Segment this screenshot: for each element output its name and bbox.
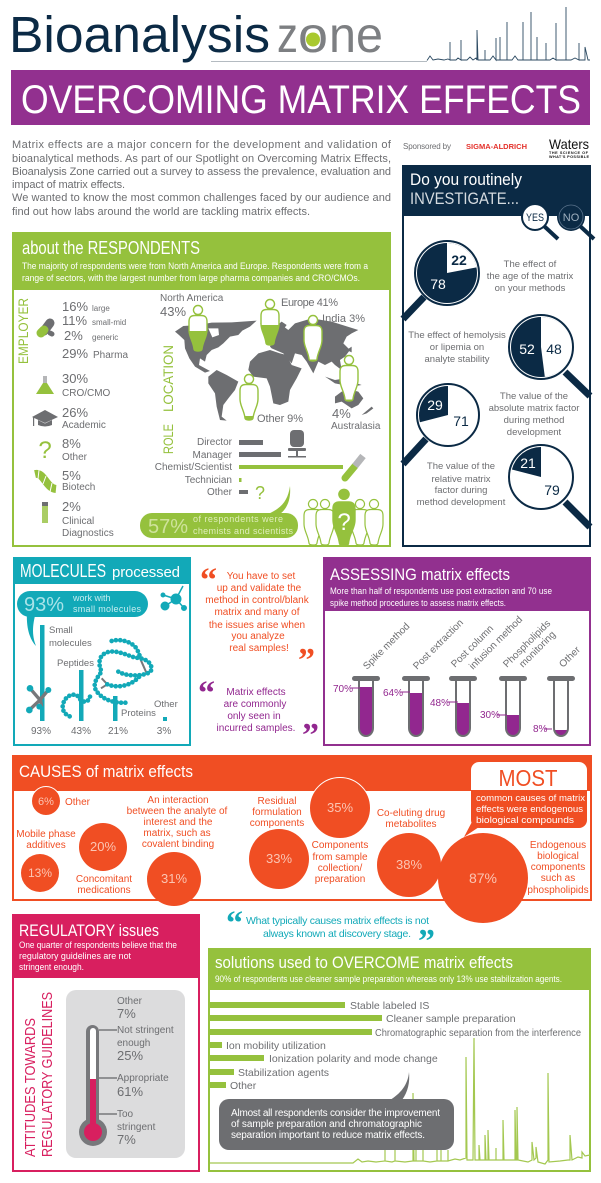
employer: pharma xyxy=(62,299,128,361)
quote: incurred samples: are commonly xyxy=(224,699,286,710)
employer: clinical diagnostics: Diagnostics xyxy=(62,528,114,539)
bar chart: solutions: Cleaner sample preparation xyxy=(386,1013,516,1025)
tube: post column infusion 48% xyxy=(430,614,525,736)
panel heading: INVESTIGATE... xyxy=(410,189,519,208)
tube: phospholipids monitoring 30% xyxy=(480,618,558,736)
pie: absolute matrix factor 29/71: 29 xyxy=(427,397,443,413)
employer: pharma: 11% xyxy=(62,313,87,328)
cause: residual formulation 33%: 33% xyxy=(266,851,292,866)
sponsors: Sponsored by xyxy=(403,142,451,151)
thermometer card xyxy=(66,990,185,1158)
bar chart: molecule types: Small xyxy=(49,625,73,636)
pie: age of matrix 22/78: 78 xyxy=(430,276,446,292)
logo: Bioanalysis Zone: Bioanalysis xyxy=(9,6,270,63)
pie: hemolysis 48/52: 52 xyxy=(519,341,535,357)
tube: other 8%: 8% xyxy=(533,724,548,735)
cause: concomitant medications 20% xyxy=(76,823,132,896)
cause: analyte-matrix interaction 31%: An interaction xyxy=(147,795,209,806)
employer: pharma: 16% xyxy=(62,299,88,314)
quote: control/blank matrix: method in control/blank xyxy=(205,595,310,606)
employer: other xyxy=(62,436,88,463)
employer: clinical diagnostics: Clinical xyxy=(62,516,94,527)
quote: incurred samples: only seen in xyxy=(227,711,281,722)
callout: 93% small molecules xyxy=(17,591,148,646)
illustration: peptide chain xyxy=(63,695,90,717)
logo: Bioanalysis Zone: z xyxy=(277,7,298,63)
cause: concomitant medications 20%: medications xyxy=(77,885,131,896)
quote: control/blank matrix: matrix and many of xyxy=(214,607,300,618)
cause: co-eluting metabolites 38%: Co-eluting drug xyxy=(377,808,445,819)
person: Australasia 4% xyxy=(340,356,358,401)
thermometer labels: stringent xyxy=(117,1122,156,1133)
thermometer labels: Too xyxy=(117,1109,134,1120)
intro text: Bioanalysis Zone carried out a survey to assess the prevalence, evaluation and xyxy=(12,166,391,178)
icon: vial xyxy=(42,502,48,523)
employer: academic: Academic xyxy=(62,420,106,431)
cause: endogenous compounds 87%: Endogenous xyxy=(530,840,586,851)
pie: age of matrix 22/78: 22 xyxy=(451,252,467,268)
tube: phospholipids monitoring 30%: 30% xyxy=(480,710,500,721)
thermometer labels: 61% xyxy=(117,1084,143,1099)
cause: co-eluting metabolites 38%: 38% xyxy=(396,857,422,872)
icon: group of people: ? xyxy=(337,509,351,536)
cause: co-eluting metabolites 38% xyxy=(377,808,445,897)
question text: relative matrix factor xyxy=(417,461,506,508)
cause: mobile phase additives 13% xyxy=(16,829,76,892)
respondents heading: about the RESPONDENTS xyxy=(22,238,200,258)
logo: Bioanalysis Zone: ne xyxy=(329,7,383,63)
bar chart: molecule types: molecules xyxy=(49,638,92,649)
quote: incurred samples: Matrix effects xyxy=(226,687,286,698)
callout: 93% small molecules: work with xyxy=(72,593,111,603)
bar chart: solutions: Ionization polarity and mode change xyxy=(269,1053,438,1065)
legend: yes magnifier: YES xyxy=(526,212,544,224)
cause: endogenous compounds 87%: components xyxy=(531,862,585,873)
question text: hemolysis xyxy=(408,330,506,365)
icon: office chair xyxy=(288,430,306,458)
question text: absolute matrix factor: The value of the xyxy=(500,391,568,402)
regulatory subtitle xyxy=(19,940,177,972)
location labels: 43% xyxy=(160,304,186,319)
tube: post column infusion 48%: infusion method xyxy=(467,614,525,672)
employer: pharma: 29% xyxy=(62,346,88,361)
sponsors: Waters xyxy=(549,136,589,152)
cause: residual formulation 33%: formulation xyxy=(252,807,302,818)
bar chart: molecule types xyxy=(31,625,178,737)
molecules heading: processed xyxy=(112,564,180,581)
location labels: North America xyxy=(160,293,224,304)
vertical label: attitudes towards regulatory guidelines: REGULATORY GUIDELINES xyxy=(39,992,56,1157)
bar chart: molecule types: 3% xyxy=(157,726,171,737)
cause: sample collection 35%: 35% xyxy=(327,800,353,815)
callout: sample preparation importance: of sample preparation and chromatographic xyxy=(231,1119,422,1130)
thermometer labels: Other xyxy=(117,996,143,1007)
thermometer labels: Not stringent xyxy=(117,1025,174,1036)
tube: post extraction 64% xyxy=(383,618,466,736)
regulatory subtitle: stringent enough. xyxy=(19,962,84,972)
panel: molecules processed xyxy=(13,557,191,745)
thermometer labels: 25% xyxy=(117,1048,143,1063)
pie: relative matrix factor 21/79: 79 xyxy=(544,482,560,498)
tube: other 8%: Other xyxy=(557,644,583,670)
callout: sample preparation importance: separation important to reduce matrix effects. xyxy=(231,1130,425,1141)
question text: relative matrix factor: relative matrix xyxy=(431,474,491,485)
callout: MOST common causes: biological compounds xyxy=(476,815,574,826)
tube: post column infusion 48%: Post column xyxy=(449,623,496,670)
callout: 57% chemists and scientists: 57% xyxy=(148,516,188,538)
cause: analyte-matrix interaction 31%: 31% xyxy=(161,871,187,886)
solutions heading: solutions used to OVERCOME matrix effects xyxy=(215,953,513,972)
person: India 3% xyxy=(304,316,322,361)
role bar chart: Director xyxy=(197,437,233,448)
cause: residual formulation 33%: Residual xyxy=(258,796,296,807)
cause: residual formulation 33% xyxy=(249,796,309,889)
cause: mobile phase additives 13%: 13% xyxy=(28,866,52,880)
causes heading: CAUSES of matrix effects xyxy=(19,762,193,781)
cause: analyte-matrix interaction 31% xyxy=(127,795,228,906)
tube: spike method 70%: 70% xyxy=(333,684,353,695)
quote: control/blank matrix: the issues arise when xyxy=(209,620,305,631)
location vertical label: LOCATION xyxy=(160,345,176,412)
bar chart: molecule types: Peptides xyxy=(57,658,94,669)
respondents subtitle: The majority of respondents were from North America and Europe. Respondents were from a xyxy=(22,261,369,271)
logo: Bioanalysis Zone xyxy=(9,6,383,63)
molecules heading: MOLECULES xyxy=(20,561,106,581)
world map xyxy=(175,318,373,421)
cause: sample collection 35% xyxy=(310,778,370,885)
cause: analyte-matrix interaction 31%: covalent binding xyxy=(142,839,214,850)
quote: incurred samples xyxy=(198,675,319,754)
tube: other 8% xyxy=(533,644,583,736)
icon: thermometer xyxy=(79,1025,117,1146)
molecules heading xyxy=(20,561,180,581)
employer: pharma: small-mid xyxy=(92,318,126,327)
quote: control/blank matrix: up and validate the xyxy=(217,583,302,594)
respondents subtitle xyxy=(22,261,369,283)
cause: endogenous compounds 87%: such as xyxy=(541,873,575,884)
question text: relative matrix factor: The value of the xyxy=(427,461,495,472)
cause: sample collection 35%: Components xyxy=(312,840,368,851)
cause: other 6%: 6% xyxy=(38,796,54,808)
panel: regulatory issues xyxy=(12,914,200,1171)
callout: sample preparation importance: Almost all respondents consider the improvement xyxy=(231,1108,440,1119)
question text: absolute matrix factor: absolute matrix factor xyxy=(489,403,579,414)
callout: MOST common causes: effects were endogenous xyxy=(476,804,583,815)
pie: absolute matrix factor 29/71: 71 xyxy=(453,413,469,429)
panel: solutions to overcome matrix effects xyxy=(208,948,591,1171)
thermometer labels: enough xyxy=(117,1038,150,1049)
cause: endogenous compounds 87%: 87% xyxy=(469,870,497,886)
bar chart: solutions: Stable labeled IS xyxy=(350,1000,429,1012)
cause: mobile phase additives 13%: additives xyxy=(26,840,66,851)
employer: other: 8% xyxy=(62,436,81,451)
thermometer labels: 7% xyxy=(117,1006,136,1021)
bar chart: solutions xyxy=(209,1000,581,1092)
thermometer labels: Appropriate xyxy=(117,1073,169,1084)
assessing heading: ASSESSING matrix effects xyxy=(330,565,510,584)
panel heading xyxy=(410,170,522,208)
pie: relative matrix factor 21/79 xyxy=(509,445,590,527)
icon: question mark: ? xyxy=(38,437,52,464)
icon: group of people xyxy=(304,489,383,546)
intro text: bioanalytical methods. As part of our Spotlight on Overcoming Matrix Effects, xyxy=(12,153,391,165)
icon: capsules xyxy=(41,323,52,334)
location labels: Europe 41% xyxy=(281,297,338,309)
intro text: We wanted to know the most common challenges faced by our audience and xyxy=(12,192,391,204)
quote: discovery stage: “ xyxy=(226,905,243,942)
employer: pharma: Pharma xyxy=(93,350,128,361)
employer: clinical diagnostics xyxy=(62,499,114,539)
role vertical label: ROLE xyxy=(160,424,176,454)
icon: mortarboard xyxy=(32,410,58,426)
bar chart: molecule types: Other xyxy=(154,699,178,710)
cause: endogenous compounds 87%: phospholipids xyxy=(527,885,589,896)
pie: absolute matrix factor 29/71 xyxy=(403,384,479,464)
tube: spike method 70% xyxy=(333,621,412,736)
quote: control/blank matrix: “ xyxy=(200,562,217,599)
legend: yes magnifier xyxy=(522,204,558,239)
cause: co-eluting metabolites 38%: metabolites xyxy=(385,819,437,830)
intro text xyxy=(12,139,392,218)
tube: spike method 70%: Spike method xyxy=(361,621,412,672)
question text: absolute matrix factor: during method xyxy=(504,415,564,426)
employer vertical label: EMPLOYER xyxy=(15,298,31,364)
tube: post extraction 64%: 64% xyxy=(383,688,403,699)
person: other 9% xyxy=(240,374,258,420)
quote: incurred samples: incurred samples. xyxy=(217,723,295,734)
cause: sample collection 35%: preparation xyxy=(315,874,365,885)
question text: hemolysis: or lipemia on xyxy=(430,342,484,353)
legend: no magnifier: NO xyxy=(563,212,580,224)
callout: 57% chemists and scientists: of respondents were xyxy=(193,514,283,524)
quote: discovery stage: What typically causes matrix effects is not xyxy=(246,915,429,927)
bar chart: molecule types: 21% xyxy=(108,726,128,737)
question text: absolute matrix factor xyxy=(489,391,579,438)
panel heading: Do you routinely xyxy=(410,170,522,189)
employer: clinical diagnostics: 2% xyxy=(62,499,81,514)
solutions subtitle: 90% of respondents use cleaner sample preparation whereas only 13% use stabilization agents. xyxy=(215,974,562,984)
cause: residual formulation 33%: components xyxy=(250,818,304,829)
icon: molecule xyxy=(161,586,186,610)
bar chart: molecule types: Proteins xyxy=(121,708,156,719)
question text: relative matrix factor: method development xyxy=(417,497,506,508)
location labels: 4% xyxy=(332,406,351,421)
chromatogram background xyxy=(210,1038,590,1164)
location labels: Australasia xyxy=(331,421,381,432)
cause: analyte-matrix interaction 31%: matrix, such as xyxy=(143,828,211,839)
location labels xyxy=(160,293,381,432)
quote: control/blank matrix: ” xyxy=(298,642,315,679)
pie: age of matrix 22/78 xyxy=(403,241,479,319)
employer: biotech: 5% xyxy=(62,468,81,483)
logo: Bioanalysis Zone: o xyxy=(298,7,328,63)
employer: CRO/CMO xyxy=(62,371,111,399)
pie: hemolysis 48/52: 48 xyxy=(546,341,562,357)
regulatory subtitle: regulatory guidelines are not xyxy=(19,951,131,961)
quote: discovery stage: ” xyxy=(418,923,435,960)
role bar chart xyxy=(155,437,343,498)
cause: sample collection 35%: from sample xyxy=(312,852,368,863)
icon: DNA xyxy=(35,470,56,492)
cause: other 6% xyxy=(32,786,91,816)
location labels: India 3% xyxy=(322,313,365,325)
vertical label: attitudes towards regulatory guidelines xyxy=(22,992,56,1157)
callout: MOST common causes: common causes of matrix xyxy=(476,793,585,804)
employer: pharma: generic xyxy=(92,333,118,342)
bar chart: solutions: Ion mobility utilization xyxy=(226,1040,326,1052)
icon: question mark role: ? xyxy=(255,483,265,503)
employer: biotech: Biotech xyxy=(62,482,95,493)
question text: age: The effect of xyxy=(504,259,557,270)
tube: phospholipids monitoring 30%: monitoring xyxy=(517,629,558,670)
question text: hemolysis: analyte stability xyxy=(425,354,490,365)
person: Europe 41% xyxy=(261,300,279,345)
bar chart: solutions: Stabilization agents xyxy=(238,1067,329,1079)
panel: causes of matrix effects xyxy=(12,755,592,923)
bar chart: molecule types: 93% xyxy=(31,726,51,737)
tube: phospholipids monitoring 30%: Phospholipids xyxy=(501,618,553,670)
cause: analyte-matrix interaction 31%: between the analyte of xyxy=(127,806,228,817)
assessing subtitle: More than half of respondents use post extraction and 70 use xyxy=(330,586,552,596)
location labels: Other 9% xyxy=(257,413,303,425)
employer: pharma: large xyxy=(92,304,110,313)
question text: age xyxy=(487,259,574,294)
legend: no magnifier xyxy=(557,203,594,239)
callout: MOST common causes xyxy=(464,762,587,837)
regulatory heading: REGULATORY issues xyxy=(19,921,159,940)
quote: discovery stage: always known at discovery stage. xyxy=(263,928,411,940)
employer: academic xyxy=(62,405,106,431)
cause: analyte-matrix interaction 31%: interest and the xyxy=(144,817,213,828)
quote: incurred samples: ” xyxy=(302,717,319,754)
bar chart: molecule types: 43% xyxy=(71,726,91,737)
cause: concomitant medications 20%: Concomitant xyxy=(76,874,132,885)
intro text: impact of matrix effects. xyxy=(12,179,125,191)
employer: academic: 26% xyxy=(62,405,88,420)
role bar chart: Manager xyxy=(193,450,233,461)
intro text: Matrix effects are a major concern for the development and validation of xyxy=(12,139,392,151)
pie: hemolysis 48/52 xyxy=(509,315,590,396)
assessing subtitle: spike method procedures to assess matrix effects. xyxy=(330,598,506,608)
question text: hemolysis: The effect of hemolysis xyxy=(408,330,506,341)
pie: relative matrix factor 21/79: 21 xyxy=(520,455,536,471)
panel: do you routinely investigate xyxy=(402,165,594,546)
sponsors: WHAT'S POSSIBLE xyxy=(549,155,589,159)
illustration: protein chain xyxy=(95,640,151,703)
cause: sample collection 35%: collection/ xyxy=(318,863,362,874)
person: North America 43% xyxy=(189,306,207,351)
employer: other: Other xyxy=(62,452,88,463)
bar chart: solutions: Chromatographic separation from the interference xyxy=(375,1027,581,1039)
thermometer labels xyxy=(117,996,174,1147)
cause: endogenous compounds 87% xyxy=(438,833,589,923)
tube: post extraction 64%: Post extraction xyxy=(411,618,466,672)
question text: relative matrix factor: factor during xyxy=(435,485,487,496)
quote: control/blank matrix: you analyze xyxy=(231,631,285,642)
icon: test tube xyxy=(345,456,363,478)
employer: pharma: 2% xyxy=(64,328,83,343)
spectrum: header chromatogram xyxy=(211,7,590,62)
bar chart: solutions: Other xyxy=(230,1080,257,1092)
callout: 57% chemists and scientists: chemists and scientists xyxy=(193,526,294,536)
panel: about the respondents xyxy=(12,232,391,546)
cause: other 6%: Other xyxy=(65,797,91,808)
tube: post column infusion 48%: 48% xyxy=(430,698,450,709)
cause: endogenous compounds 87%: biological xyxy=(537,851,579,862)
thermometer labels: 7% xyxy=(117,1132,136,1147)
quote: discovery stage xyxy=(226,905,435,960)
icon: flask xyxy=(36,376,54,394)
regulatory subtitle: One quarter of respondents believe that the xyxy=(19,940,177,950)
callout: 57% chemists and scientists xyxy=(140,486,298,538)
employer: CRO/CMO: CRO/CMO xyxy=(62,388,111,399)
sponsors xyxy=(403,136,589,159)
question text: absolute matrix factor: development xyxy=(507,427,562,438)
intro text: find out how labs around the world are tackling matrix effects. xyxy=(12,206,310,218)
sponsors: SIGMA-ALDRICH xyxy=(466,142,527,151)
role bar chart: Technician xyxy=(185,475,232,486)
quote: control/blank matrix xyxy=(200,562,315,679)
employer: CRO/CMO: 30% xyxy=(62,371,88,386)
callout: sample preparation importance xyxy=(219,1072,454,1150)
callout: MOST common causes: MOST xyxy=(498,765,558,791)
sponsors: THE SCIENCE OF xyxy=(549,151,589,155)
quote: control/blank matrix: real samples! xyxy=(229,643,289,654)
assessing subtitle xyxy=(330,586,552,608)
vertical label: attitudes towards regulatory guidelines: ATTITUDES TOWARDS xyxy=(22,1018,39,1157)
question text: age: on your methods xyxy=(495,283,566,294)
role bar chart: Chemist/Scientist xyxy=(155,462,232,473)
illustration: small molecule xyxy=(26,685,51,713)
quote: incurred samples: “ xyxy=(198,675,215,712)
employer: biotech xyxy=(62,468,95,493)
question text: age: the age of the matrix xyxy=(487,271,574,282)
callout: 93% small molecules: 93% xyxy=(24,594,64,616)
cause: concomitant medications 20%: 20% xyxy=(90,839,116,854)
quote: control/blank matrix: You have to set xyxy=(227,571,296,582)
panel: assessing matrix effects xyxy=(323,557,591,745)
role bar chart: Other xyxy=(207,487,233,498)
cause: mobile phase additives 13%: Mobile phase xyxy=(16,829,76,840)
respondents subtitle: range of sectors, with the largest number from large pharma companies and CRO/CMOs. xyxy=(22,273,360,283)
callout: 93% small molecules: small molecules xyxy=(73,604,142,614)
